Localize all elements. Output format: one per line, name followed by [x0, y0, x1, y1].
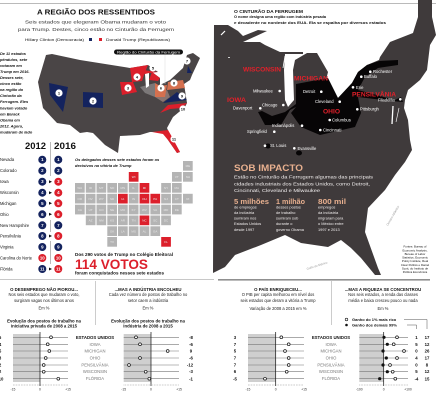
- subtitle: para Trump. Destes, cinco estão no Cinturão da Ferrugem: [18, 27, 174, 33]
- table: swing state results 2012 vs 2016: 2: [41, 168, 44, 173]
- city markers: Chicago: [262, 102, 278, 108]
- panel: impact: da indústria: [234, 210, 255, 215]
- source credits: Policy Institute, Real: [402, 259, 428, 263]
- tile grid map: VA: [153, 208, 157, 212]
- city markers: Cincinnati: [323, 128, 341, 132]
- dot plot: +100: [404, 388, 412, 392]
- dot plot: 5: [415, 369, 418, 374]
- electoral votes callout: Dos 290 votos de Trump no Colégio Eleitoral: [75, 252, 173, 257]
- tile grid map: AR: [121, 218, 126, 222]
- heading: rust belt: [234, 9, 386, 25]
- dot plot: 5: [415, 342, 418, 347]
- tile grid map: DE: [175, 208, 179, 212]
- dot plot: 7: [234, 342, 237, 347]
- tile grid map: MD: [164, 208, 169, 212]
- heading: rust belt: O CINTURÃO DA FERRUGEM: [234, 9, 303, 14]
- table: swing state results 2012 vs 2016: 8: [41, 234, 44, 238]
- dot plot: -8: [189, 335, 194, 340]
- tile grid map: UT: [89, 208, 93, 212]
- source credits: Fontes: Bureau of: [404, 244, 427, 248]
- state labels column 1: FLÓRIDA: [86, 376, 104, 381]
- panel: unemployment: Evolução dos postos de trabalho na: [7, 318, 81, 324]
- tile grid map: OK: [110, 229, 114, 233]
- panel: unemployment: surgiram vagas nos últimos anos: [14, 298, 74, 303]
- dot plot: -3: [189, 369, 194, 374]
- tile grid map: NC: [142, 218, 147, 222]
- ocean labels: [306, 205, 400, 271]
- state labels column 2: [312, 335, 350, 381]
- electoral delegates note: Os delegados desses sete estados foram os: [75, 157, 160, 162]
- side note: cinco estão: [0, 81, 22, 86]
- dot plot: 0: [150, 388, 152, 392]
- table: swing state results 2012 vs 2016: New Hampshire: [0, 223, 30, 228]
- state labels column 2: OHIO: [326, 356, 337, 360]
- state names: PENSILVÂNIA: [352, 92, 397, 98]
- map: rust belt detail: [213, 0, 436, 275]
- panel: impact: 800 mil: [318, 199, 346, 206]
- dot plot: 7: [234, 362, 237, 368]
- state labels column 1: PENSILVÂNIA: [81, 362, 109, 368]
- table: swing state results 2012 vs 2016: [0, 142, 62, 273]
- state: Nevada: [49, 83, 68, 112]
- tile grid map: WI: [132, 175, 136, 179]
- tile grid map: PA: [153, 197, 157, 201]
- panel: impact: durante o: [276, 221, 292, 226]
- map badges: 5: [152, 66, 155, 70]
- state: Colorado: [83, 92, 103, 108]
- dot plot: 0: [415, 362, 418, 368]
- panel: wealth: ...MAS A RIQUEZA SE CONCENTROU: [345, 287, 421, 292]
- map badges: 8: [173, 80, 176, 86]
- dot plot: -100: [356, 388, 363, 392]
- panel: impact: da indústria: [318, 210, 339, 215]
- panel: unemployment: iniciativa privada de 2008 a 2015: [11, 324, 78, 328]
- panel: industry: [109, 287, 194, 392]
- city markers: Columbus: [332, 118, 351, 122]
- panel: GDP: O PIB per capita melhorou em nível dos: [242, 292, 314, 297]
- panel: impact: 1997 e 2013: [318, 227, 340, 232]
- dot plot: 6: [234, 369, 237, 374]
- table: swing state results 2012 vs 2016: 4: [41, 190, 44, 195]
- state labels column 1: ESTADOS UNIDOS: [76, 335, 114, 340]
- map badges: 4: [136, 74, 139, 80]
- city markers: Evansville: [298, 146, 317, 151]
- source credits: Economic Analysis,: [403, 248, 428, 252]
- panel: industry: setor caem a indústria: [128, 298, 169, 303]
- state labels column 1: [76, 335, 114, 381]
- city markers: St. Louis: [270, 143, 286, 148]
- table: swing state results 2012 vs 2016: 7: [57, 223, 60, 228]
- tile grid map: VT: [175, 175, 179, 179]
- dot plot: [356, 332, 430, 392]
- tile grid map: NH: [186, 175, 190, 179]
- tile grid map: MA: [175, 186, 179, 190]
- side note: Trump em 2016.: [0, 69, 30, 74]
- panel: GDP: seis estados que deram a vitória a Trump: [240, 298, 316, 303]
- dot plot: 0: [415, 348, 418, 354]
- table: swing state results 2012 vs 2016: 2: [57, 168, 60, 173]
- tile grid map: MT: [99, 186, 104, 190]
- city markers: Pittsburgh: [360, 106, 380, 112]
- tile grid map: NE: [110, 208, 114, 212]
- side note: [0, 51, 33, 134]
- map badges: 1: [58, 90, 61, 96]
- panel: impact: de trabalho: [276, 210, 295, 215]
- table: swing state results 2012 vs 2016: 3: [57, 179, 60, 184]
- dot plot: 1: [415, 335, 418, 340]
- city markers: Erie: [356, 85, 364, 90]
- table: swing state results 2012 vs 2016: 3: [41, 179, 44, 184]
- state labels column 1: MICHIGAN: [85, 348, 105, 354]
- dot plot: -6: [189, 356, 194, 360]
- panel: GDP: O PAÍS ENRIQUECEU...: [254, 287, 302, 292]
- panel: wealth: Nos seis estados, a renda das classes: [348, 292, 418, 297]
- dot plot: -15: [121, 388, 126, 392]
- state names: IOWA: [227, 98, 247, 104]
- tile grid map: DC: [164, 218, 169, 222]
- side note: Obama em: [0, 118, 20, 122]
- legend: Hillary Clinton (Democracia): [25, 37, 85, 42]
- dot plot: [233, 332, 307, 392]
- panel: unemployment: Nos seis estados que mudaram o voto,: [8, 292, 80, 297]
- table: swing state results 2012 vs 2016: Ohio: [0, 212, 9, 217]
- table: swing state results 2012 vs 2016: Colorado: [0, 168, 17, 173]
- tile grid map: IA: [121, 197, 124, 201]
- electoral votes callout: [75, 252, 173, 276]
- lake Michigan: [145, 73, 149, 88]
- panel: industry: Em %: [143, 306, 154, 310]
- legend: [345, 317, 427, 329]
- map badges: 6: [160, 86, 163, 90]
- dot plot: 12: [425, 369, 430, 374]
- dot plot: 9: [190, 348, 193, 354]
- panel: unemployment: [0, 287, 81, 392]
- dot plot: 17: [425, 335, 430, 340]
- dot plot: 0: [39, 388, 41, 392]
- city markers: Filadélfia: [378, 98, 395, 102]
- tile grid map: AZ: [89, 218, 93, 222]
- panel: impact: Estados Unidos: [234, 221, 261, 226]
- map badges: 11: [172, 136, 177, 142]
- side note: Cinturão da: [0, 93, 22, 98]
- tile grid map: IN: [132, 197, 135, 201]
- tile grid map: [75, 161, 193, 247]
- map badges: 9: [181, 94, 184, 98]
- side note: Desses sete,: [0, 75, 24, 80]
- state: Virginia: [163, 92, 187, 103]
- legend: Donald Trump (Republicanos): [106, 37, 171, 42]
- tile grid map: WV: [142, 208, 147, 212]
- state names: WISCONSIN: [243, 68, 281, 74]
- tile grid map: NJ: [164, 197, 168, 201]
- tile grid map: NM: [99, 218, 104, 222]
- tile grid map: MI: [143, 186, 146, 190]
- dot plot: 0: [383, 388, 385, 392]
- ocean labels: Oceano Atlântico: [385, 205, 400, 226]
- table: swing state results 2012 vs 2016: Nevada: [0, 157, 15, 162]
- table: swing state results 2012 vs 2016: 1: [57, 157, 60, 162]
- state: Michigan: [143, 70, 160, 81]
- state labels column 2: PENSILVÂNIA: [317, 362, 345, 368]
- table header: [25, 141, 76, 151]
- dot plot: 17: [425, 356, 430, 360]
- source credits: Clear Politics e Daniel: [401, 263, 429, 267]
- tile grid map: OH: [142, 197, 147, 201]
- state labels column 2: WISCONSIN: [319, 369, 343, 374]
- table: swing state results 2012 vs 2016: Michigan: [0, 201, 17, 206]
- map badges: 3: [127, 86, 130, 90]
- table: swing state results 2012 vs 2016: 11: [56, 266, 61, 272]
- dot plot: +15: [176, 388, 182, 392]
- tile grid map: CO: [99, 208, 104, 212]
- tile grid map: SD: [110, 197, 115, 201]
- side note: em Barack: [0, 112, 21, 116]
- source credits: [401, 244, 429, 274]
- panel: GDP: [233, 287, 316, 392]
- tile grid map: ME: [186, 164, 190, 168]
- table: swing state results 2012 vs 2016: Flórida: [0, 266, 13, 272]
- tile grid map: ID: [89, 186, 93, 190]
- table: swing state results 2012 vs 2016: 1: [41, 157, 44, 162]
- ocean labels: Golfo do México: [306, 260, 328, 271]
- dot plot: -15: [11, 388, 16, 392]
- tile grid map: AL: [143, 229, 147, 233]
- state names: MICHIGAN: [294, 76, 328, 82]
- tile grid map: NY: [164, 186, 168, 190]
- table: swing state results 2012 vs 2016: 5: [41, 201, 44, 206]
- table: swing state results 2012 vs 2016: 6: [41, 212, 44, 217]
- tile grid map: MN: [120, 186, 125, 190]
- electoral delegates note: decisivos na vitória de Trump: [75, 163, 132, 168]
- side note: Ferrugem. Eles: [0, 99, 29, 104]
- table: swing state results 2012 vs 2016: Iowa: [0, 179, 9, 184]
- panel: wealth: Em %: [378, 306, 389, 311]
- dot plot: -5: [233, 376, 238, 382]
- panel: impact: migraram para: [318, 216, 344, 220]
- table: swing state results 2012 vs 2016: 10: [40, 256, 45, 260]
- tile grid map: CT: [175, 197, 179, 201]
- tile grid map: CA: [78, 208, 82, 212]
- tile grid map: FL: [164, 240, 168, 244]
- tile grid map: MS: [131, 229, 136, 233]
- dot plot: 8: [426, 362, 429, 368]
- panel: industry: Cada vez número de postos de trabalho no: [109, 292, 188, 297]
- panel: impact: Cincinnati, Cleveland e Milwaukee: [234, 188, 321, 193]
- side note: haviam votado: [0, 106, 28, 110]
- city markers: Davenport: [233, 106, 253, 110]
- legend: [25, 37, 171, 42]
- source credits: Política Econômica: [403, 270, 428, 274]
- state: Ohio: [155, 83, 167, 97]
- city markers: Buffalo: [364, 74, 378, 79]
- dot plot: -12: [187, 362, 194, 368]
- panel: wealth: média e baixa cresceu pouco ou nada: [348, 298, 418, 303]
- panel: impact: SOB IMPACTO: [234, 163, 303, 174]
- tile grid map: MO: [120, 208, 126, 212]
- table: swing state results 2012 vs 2016: 7: [41, 223, 44, 228]
- panel: impact: governo Obama: [276, 227, 305, 232]
- panel: impact: cidades industriais dos Estados Unidos, como Detroit,: [234, 182, 370, 186]
- panel: industry: Evolução dos postos de trabalho na: [111, 318, 185, 324]
- bays and islands: [221, 31, 399, 124]
- panel: wealth: [345, 287, 430, 392]
- tile grid map: TN: [132, 218, 136, 222]
- state: Iowa: [120, 82, 137, 95]
- state names: [227, 68, 397, 116]
- US map with swing states: [38, 50, 200, 153]
- source credits: Statistics, Economic: [402, 256, 428, 260]
- panel: impact: desses postos: [276, 204, 301, 210]
- map badges: 2: [92, 98, 95, 104]
- tile grid map: RI: [186, 197, 190, 201]
- dot plot: 12: [425, 342, 430, 347]
- dot plot: 0: [275, 388, 277, 392]
- panel: industry: indústria de 2008 a 2015: [123, 324, 173, 328]
- dot plot: -6: [189, 342, 194, 347]
- state: New Hampshire: [187, 66, 192, 73]
- panel: impact: desde 1997: [234, 227, 254, 232]
- table: swing state results 2012 vs 2016: 10: [56, 256, 61, 260]
- state labels column 2: IOWA: [325, 342, 337, 347]
- tile grid map: WY: [99, 197, 104, 201]
- panel: impact: o México entre: [318, 221, 344, 226]
- panel: impact: sumiram sob: [276, 216, 298, 220]
- city markers: Detroit: [303, 89, 316, 94]
- tile grid map: LA: [121, 229, 125, 233]
- state labels column 2: ESTADOS UNIDOS: [312, 335, 350, 340]
- tile grid map: KY: [132, 208, 136, 212]
- panel: impact: sumiram nos: [234, 216, 256, 220]
- dot plot: -4: [415, 376, 419, 382]
- electoral delegates note: [75, 157, 160, 168]
- table: swing state results 2012 vs 2016: 5: [57, 201, 60, 206]
- title: A REGIÃO DOS RESSENTIDOS: [37, 8, 155, 16]
- panel: unemployment: Em %: [39, 306, 50, 310]
- state labels column 2: MICHIGAN: [321, 348, 341, 354]
- state labels column 1: WISCONSIN: [83, 369, 107, 374]
- map badges: [55, 57, 191, 143]
- rust belt region: [258, 60, 403, 135]
- subtitle: Seis estados que elegeram Obama mudaram o voto: [25, 20, 166, 26]
- dot plot: +15: [65, 388, 71, 392]
- panel: impact: de empregos: [234, 204, 257, 210]
- table: swing state results 2012 vs 2016: Pensilvânia: [0, 234, 22, 238]
- dot plot: +15: [301, 388, 307, 392]
- dot plot: 4: [415, 356, 418, 360]
- electoral votes callout: foram conquistados nesses sete estados: [75, 270, 165, 276]
- side note: 2012. Agora,: [0, 124, 23, 128]
- state names: OHIO: [323, 110, 340, 116]
- dot plot: 26: [425, 348, 430, 354]
- city markers: Indianápolis: [272, 123, 294, 128]
- state: Florida: [152, 130, 180, 153]
- side note: De 11 estados: [0, 51, 27, 56]
- callout: rust belt region: [114, 50, 183, 54]
- panel: impact: Estão no Cinturão da Ferrugem algumas das principais: [234, 174, 374, 180]
- legend: Ganho dos demais 99%: [352, 322, 397, 328]
- panel: impact: 5 milhões: [234, 199, 269, 206]
- tile grid map: TX: [110, 240, 114, 244]
- city markers: Springfield: [247, 129, 267, 134]
- side note: pêndulos, sete: [0, 57, 28, 62]
- table: swing state results 2012 vs 2016: 6: [57, 212, 60, 217]
- panel: impact: 1 milhão: [276, 199, 305, 206]
- dot plot: 5: [234, 348, 237, 354]
- city markers: [233, 69, 402, 151]
- panel: industry: ...MAS A INDÚSTRIA ENCOLHEU: [115, 287, 181, 292]
- state: Pennsylvania: [167, 80, 185, 90]
- source credits: Bureau of Labor: [405, 252, 425, 256]
- table: swing state results 2012 vs 2016: 8: [57, 234, 60, 238]
- tile grid map: OR: [78, 197, 83, 201]
- rust belt gray states: [140, 83, 155, 97]
- state labels column 1: OHIO: [90, 356, 101, 360]
- callout: rust belt region: Região do Cinturão da Ferrugem: [117, 50, 180, 54]
- map badges: 7: [186, 58, 189, 64]
- legend: Ganho do 1% mais rico: [352, 317, 397, 322]
- tile grid map: SC: [153, 218, 158, 222]
- side note: mudaram de lado: [0, 130, 33, 134]
- tile grid map: NV: [89, 197, 93, 201]
- city markers: Cleveland: [315, 99, 334, 104]
- dot plot: 15: [425, 376, 430, 382]
- dot plot: -15: [246, 388, 251, 392]
- dot plot: 7: [234, 356, 237, 360]
- tile grid map: WA: [77, 186, 82, 190]
- subtitle: [18, 20, 174, 33]
- city markers: Rochester: [373, 69, 393, 74]
- table: swing state results 2012 vs 2016: Carolina do Norte: [0, 256, 33, 260]
- state: North Carolina: [160, 103, 187, 113]
- table: swing state results 2012 vs 2016: Virginia: [0, 244, 14, 250]
- table: swing state results 2012 vs 2016: 11: [40, 266, 45, 272]
- table: swing state results 2012 vs 2016: Wisconsin: [0, 190, 19, 195]
- side note: votaram em: [0, 63, 22, 68]
- electoral votes callout: 114 VOTOS: [75, 256, 148, 272]
- source credits: Scott, do Instituto de: [402, 266, 429, 270]
- city markers: Milwaukee: [253, 88, 273, 94]
- tile grid map: GA: [153, 229, 157, 233]
- tile grid map: ND: [110, 186, 115, 190]
- panel: impact: [234, 163, 374, 232]
- dot plot: -1: [189, 376, 194, 382]
- table header: 2016: [54, 141, 76, 151]
- state labels column 2: FLÓRIDA: [322, 376, 340, 381]
- heading: rust belt: e decadente no nordeste dos EUA. Ela se espalha por diversos estados: [234, 21, 386, 25]
- panel: unemployment: O DESEMPREGO NÃO PIOROU...: [10, 287, 78, 292]
- panel: GDP: Variação de 2008 a 2015 em %: [249, 306, 307, 311]
- dot plot: [0, 332, 71, 392]
- state labels column 1: IOWA: [89, 342, 101, 347]
- state: Wisconsin: [130, 65, 148, 82]
- side note: na região do: [0, 87, 24, 92]
- tile grid map: IL: [132, 186, 135, 190]
- map badges: 10: [181, 106, 186, 112]
- heading: rust belt: O nome designa uma região com indústria pesada: [234, 15, 327, 19]
- table: swing state results 2012 vs 2016: 4: [57, 190, 60, 195]
- table: swing state results 2012 vs 2016: 9: [57, 244, 60, 250]
- dot plot: [121, 332, 194, 392]
- table header: 2012: [25, 141, 46, 151]
- tile grid map: KS: [110, 218, 114, 222]
- panel: impact: empregos: [318, 204, 335, 210]
- table: swing state results 2012 vs 2016: 9: [41, 244, 44, 250]
- dot plot: 3: [234, 335, 237, 340]
